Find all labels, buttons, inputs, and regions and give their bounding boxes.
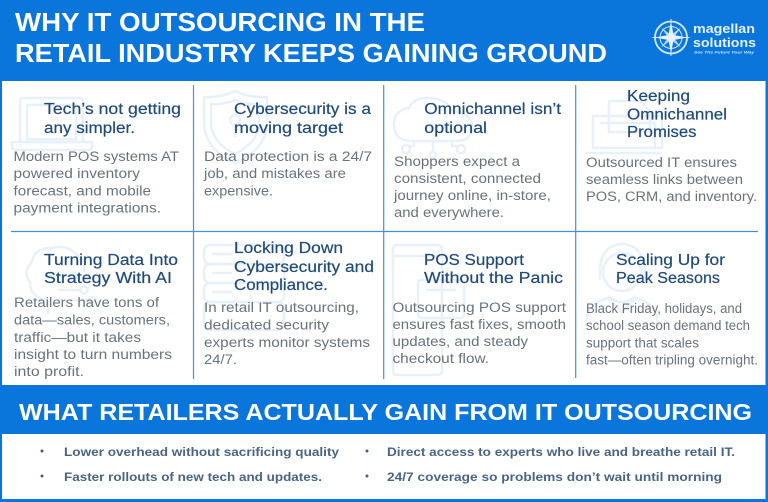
card: scaling up [586,244,758,368]
benefit list left [40,445,339,484]
heading [616,252,725,287]
heading: Omnichannel [627,106,727,124]
icon: support agent [586,244,658,326]
logo: magellan solutions: magellan [693,21,755,36]
heading: moving target [234,120,344,137]
text block: In retail IT outsourcing, [204,300,359,315]
icon: shield [204,91,267,163]
section heading: WHAT RETAILERS ACTUALLY GAIN FROM IT OUTSOURCING [19,399,752,425]
heading: Promises [627,124,697,141]
icon: POS terminal [393,245,464,375]
card: data into strategy [14,247,178,379]
text block [586,155,757,204]
card: locking down cybersecurity [204,240,374,367]
text block: Shoppers expect a [394,154,521,169]
text block: consistent, connected [394,171,541,186]
text block: data—sales, customers, [14,313,170,328]
text block: payment integrations. [14,200,161,216]
title [15,9,607,68]
heading: Keeping [627,88,690,105]
heading: Compliance. [234,277,328,294]
card: keeping omnichannel promises [585,88,757,204]
heading: Locking Down [234,240,343,257]
text block [14,295,172,379]
benefit list right: Direct access to experts who live and breathe retail IT. [387,445,735,459]
heading: optional [424,120,487,137]
text block: traffic—but it takes [14,330,141,345]
heading [424,252,563,287]
logo: magellan solutions [652,19,756,56]
icon: laptop [12,98,92,150]
icon: AI brain [26,247,95,314]
text block: POS, CRM, and inventory. [586,189,757,204]
text block: insight to turn numbers [14,347,172,362]
icon: server stack [204,245,284,330]
text block: Outsourced IT ensures [586,155,737,170]
text block [393,154,551,220]
heading [234,101,371,137]
heading: Cybersecurity and [234,259,374,276]
benefit list left: Faster rollouts of new tech and updates. [64,470,322,484]
text block: Modern POS systems AT [14,149,179,164]
heading: Peak Seasons [616,270,720,287]
title: WHY IT OUTSOURCING IN THE [15,9,425,37]
heading: Cybersecurity is a [234,101,371,118]
text block: Data protection is a 24/7 [204,149,372,164]
heading: Tech’s not getting [44,101,181,118]
card: POS support [392,245,566,375]
logo: magellan solutions: solutions [693,35,756,50]
card: omnichannel [393,98,562,220]
panel: benefits [2,434,766,499]
logo: magellan solutions: See The Future Your Way [694,50,755,54]
text block [14,149,179,216]
text block [203,149,372,198]
text block: into profit. [14,364,84,379]
text block: Outsourcing POS support [392,300,566,315]
heading: Without the Panic [424,270,563,287]
heading [627,88,727,141]
text block: Black Friday, holidays, and [586,301,742,316]
text block: forecast, and mobile [14,184,151,198]
text block: job, and mistakes are [203,166,346,181]
text block: Retailers have tons of [14,295,159,310]
text block: journey online, in-store, [393,188,551,203]
benefit list left: Lower overhead without sacrificing quality [64,445,339,459]
text block: ensures fast fixes, smooth [392,317,566,332]
heading: Turning Data Into [44,252,178,269]
title: RETAIL INDUSTRY KEEPS GAINING GROUND [15,40,607,68]
text block: school season demand tech [586,318,750,333]
text block: experts monitor systems [204,335,370,350]
text block: seamless links between [586,172,743,187]
benefit list right [366,445,735,484]
text block: fast—often tripling overnight. [586,352,758,368]
text block [392,300,566,366]
text block: 24/7. [204,352,237,367]
heading: Omnichannel isn’t [424,101,562,118]
panel: main grid [2,81,766,385]
heading [44,101,181,137]
heading [424,101,562,137]
text block: dedicated security [204,318,329,332]
card: tech not getting simpler [12,98,181,216]
icon: cloud network [394,98,472,158]
text block [204,300,370,367]
text block: powered inventory [14,166,140,181]
card: cybersecurity [203,91,372,198]
benefit list right: 24/7 coverage so problems don’t wait until morning [387,470,722,484]
heading: any simpler. [44,120,135,137]
text block: and everywhere. [394,205,504,220]
text block: updates, and steady [392,334,528,349]
heading: Scaling Up for [616,252,725,269]
heading [234,240,374,294]
text block [586,301,758,368]
text block: support that scales [586,336,699,350]
heading: POS Support [424,252,525,269]
text block: expensive. [204,184,273,198]
heading [44,252,178,287]
icon: laptop with document [585,101,662,153]
text block: checkout flow. [392,351,489,366]
heading: Strategy With AI [44,270,172,287]
